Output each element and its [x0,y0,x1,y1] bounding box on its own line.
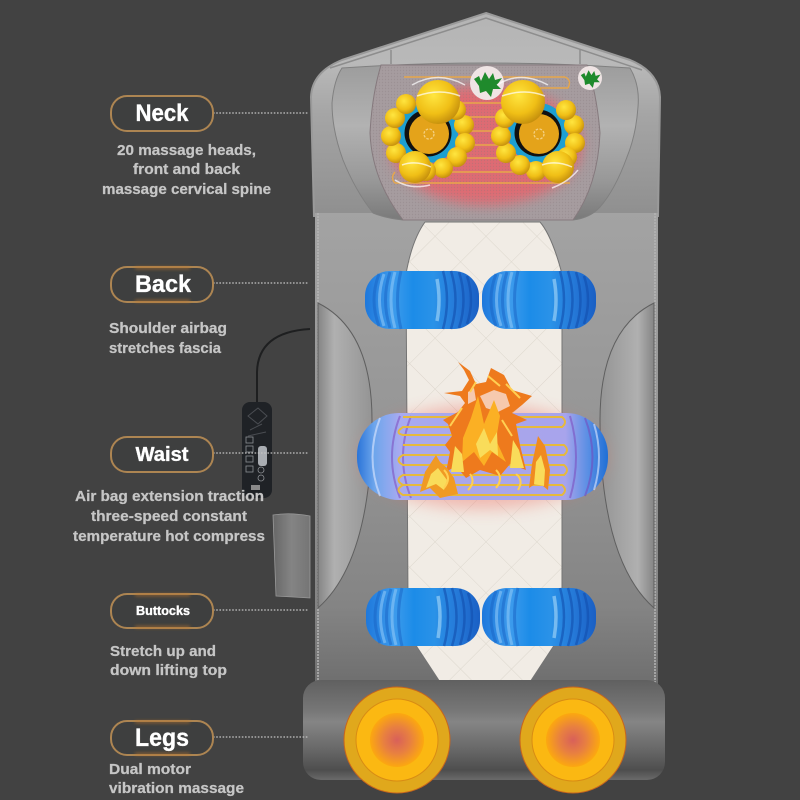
side pocket [273,514,310,598]
mat body [315,213,658,693]
callout: back: Back [135,271,192,298]
herb icon large [470,66,504,100]
callout: neck: Neck [136,100,189,127]
text: back description: stretches fascia [109,340,222,357]
neck mesh pad [370,65,600,220]
right leg vibration motor [520,687,626,793]
outer flame [443,362,532,478]
cream quilted panel [406,222,563,682]
text: buttocks description [110,643,227,679]
text: legs description [109,761,244,797]
text: back description [109,320,227,357]
mat head section [311,13,660,216]
text: waist description: temperature hot compress [73,528,265,545]
text: neck description: front and back [133,161,241,178]
text: waist description: Air bag extension traction [75,488,264,505]
top left air bag [365,271,479,329]
text: waist description [73,488,265,545]
mat body edges [318,213,655,690]
heat glow [390,85,582,205]
callout: legs: Legs [135,724,189,752]
right small flame [529,436,550,490]
remote control [242,402,272,498]
flames [420,362,550,498]
text: neck description: massage cervical spine [102,181,271,198]
waist heat glow [361,405,605,509]
left bolster [318,303,372,608]
left small flame [420,455,458,498]
leg roller [303,680,665,780]
bottom left air bag [366,588,480,646]
remote cable [257,329,310,402]
head stitched seam [330,18,642,70]
massage mat [273,13,665,780]
text: buttocks description: Stretch up and [110,643,216,660]
text: waist description: three-speed constant [91,508,247,525]
callout: buttocks [111,594,308,628]
top gaps in flame [468,388,510,412]
flame highlights [462,396,506,466]
waist air bag [357,413,608,500]
callout: waist [111,437,308,472]
right bolster [600,303,654,608]
herb icon small [578,66,602,90]
text: legs description: vibration massage [109,780,244,797]
callout: back [111,267,308,302]
text: back description: Shoulder airbag [109,320,227,337]
callout: waist: Waist [136,444,189,466]
left massage wheel [381,78,475,187]
callout: legs [111,721,308,755]
text: legs description: Dual motor [109,761,191,778]
text: neck description [102,142,271,198]
text: buttocks description: down lifting top [110,662,227,679]
callout: neck [111,96,308,131]
heating coil lines [392,77,570,183]
waist heating coil [398,417,567,495]
right massage wheel [491,78,585,188]
left leg vibration motor [344,687,450,793]
bottom right air bag [482,588,596,646]
neck cushion [332,63,638,220]
top right air bag [482,271,596,329]
text: neck description: 20 massage heads, [117,142,256,159]
callout: buttocks: Buttocks [136,603,190,618]
